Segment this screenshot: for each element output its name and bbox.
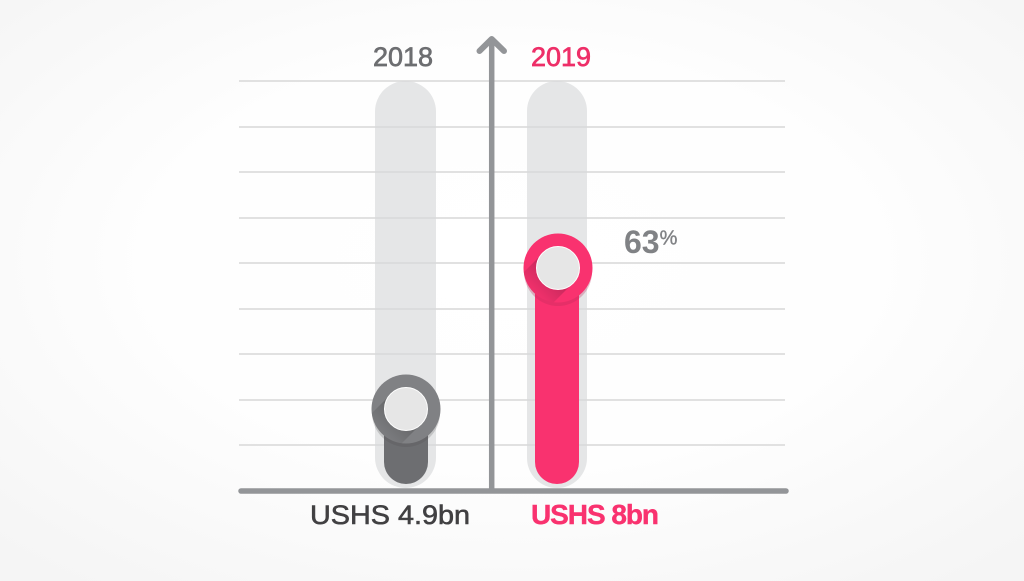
2018 value bar [384,400,428,484]
value: USHS 8bn: USHS 8bn [531,499,659,530]
infographic: USHS comparison 2018 vs 2019 [238,36,789,524]
percentage: 63%: 63 [624,224,660,260]
value: USHS 4.9bn: USHS 4.9bn [310,500,470,530]
2018 marker [372,374,440,444]
2019 value bar [535,270,579,484]
2018 track [375,81,436,488]
label: 2019: 2019 [531,42,591,72]
2019 track [527,81,587,488]
2019 marker [524,234,592,302]
2019 bar group [524,82,592,488]
label: 2018: 2018 [373,42,433,72]
percentage: 63%: % [660,228,678,250]
2018 marker shadow on bar [372,379,440,447]
axes [241,39,786,491]
2018 bar group [372,82,440,488]
2019 marker shadow on bar [524,238,592,306]
